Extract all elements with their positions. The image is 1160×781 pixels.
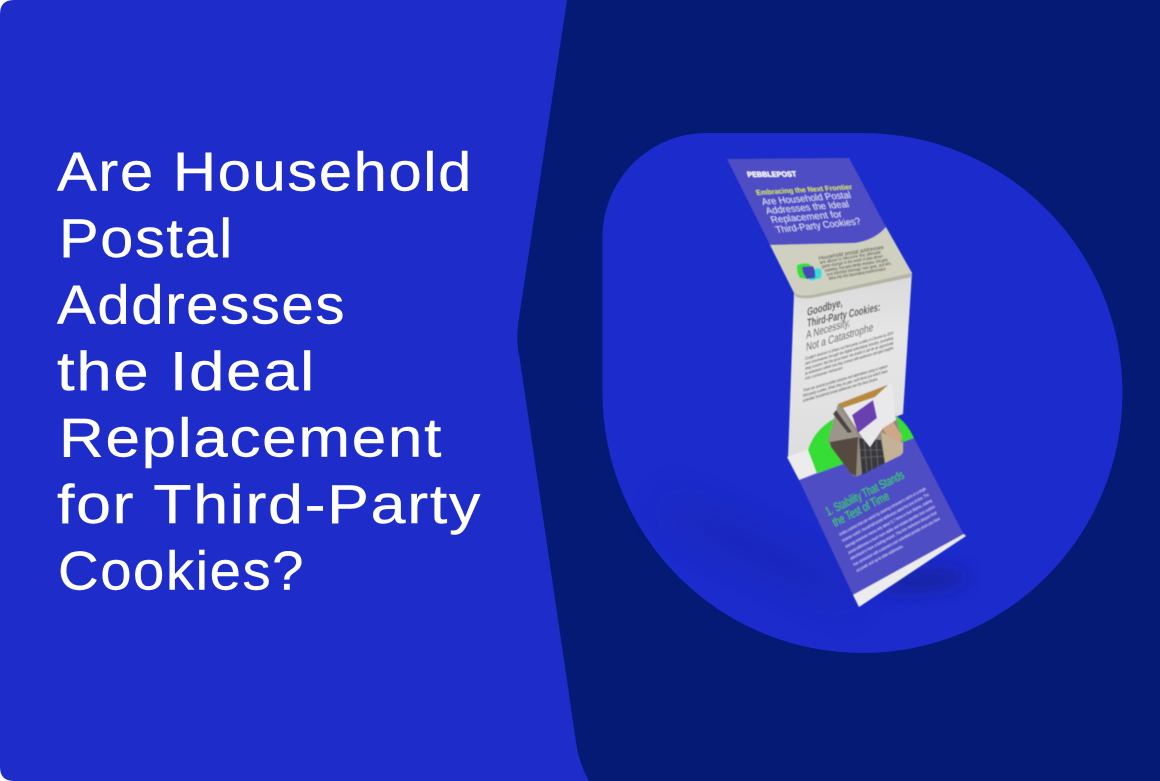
- body text: middle page: sent shockwaves through the digital advertising industry, prompting: [805, 335, 894, 366]
- envelope purple card: [852, 400, 877, 433]
- envelope paper: [843, 384, 896, 447]
- panel: fold flap: [787, 449, 817, 480]
- lower body text: [838, 486, 941, 573]
- brochure mockup: [727, 158, 966, 607]
- brochure title: [760, 190, 863, 236]
- body text: middle page: third-party cookies. When they do gain, we'll show you which have: [803, 368, 888, 398]
- title: for Third-Party: [57, 473, 482, 535]
- beige band text: your franchise leverage: here goes, and let's: [826, 261, 892, 277]
- panel: beige band: [770, 227, 912, 296]
- brochure shadow: faint left: [654, 489, 866, 615]
- icon: green and cyan badge: [797, 263, 822, 281]
- panel: dark right background: [400, 0, 1160, 781]
- heading: goodbye: Goodbye,: [807, 297, 843, 319]
- lower body text: accurate and up-to-date addresses.: [855, 543, 904, 573]
- beige band text: are about to become the ultimate: [819, 249, 882, 265]
- title: the Ideal: [57, 340, 316, 402]
- beige band text: Household postal addresses: [818, 245, 885, 262]
- logo text: PEBBLEPOST: [746, 170, 798, 179]
- photo wall stripe: [833, 410, 852, 433]
- title: Addresses: [57, 274, 346, 336]
- beige band text: marketing. First-party identity resolution, first-party: [824, 257, 889, 273]
- panel: beige band lip: [794, 272, 912, 298]
- heading: necessity: Not a Catastrophe: [806, 322, 873, 354]
- title: [57, 140, 482, 602]
- photo: hand holding mail over laptop: [828, 384, 903, 476]
- photo hand: [882, 420, 902, 442]
- heading: goodbye: Third-Party Cookies:: [807, 302, 881, 330]
- brochure title: Replacement for: [769, 209, 844, 226]
- body text: middle page: potential: household postal addresses are the best choice.: [803, 376, 878, 403]
- title: Are Household: [57, 140, 473, 202]
- lower body text: Unlike cookies that can vanish by clearing a browser's cache or a single: [838, 486, 927, 537]
- panel: blue left background: [0, 0, 589, 781]
- beige band text: game-changer in the world of data-driven: [821, 253, 884, 269]
- title: Postal: [59, 207, 234, 269]
- panel: middle white page: [788, 272, 912, 458]
- lower body text: advertised to have a lasting impact. This lets marketers deepen their: [849, 510, 938, 561]
- kicker: Embracing the Next Frontier: [755, 183, 854, 197]
- panel: white bottom strip: [853, 534, 966, 607]
- beige band text: delve into this fascinating transformation: [828, 266, 887, 281]
- photo wall with stripes: [829, 404, 858, 442]
- panel: purple top cover: [727, 158, 886, 245]
- body text: middle page: into consumer behavior.: [805, 365, 844, 381]
- brochure title: Third-Party Cookies?: [774, 217, 863, 236]
- photo laptop keyboard: [859, 438, 885, 475]
- shape: green half circle: [808, 414, 914, 474]
- body text: middle page: There are several possible solutions and alternatives vying to replace: [803, 363, 888, 393]
- body text: middle page: as advertisers rethink how they connect with audiences and gain insights: [805, 345, 893, 376]
- panel: purple lower page: [799, 438, 966, 607]
- title: Replacement: [59, 406, 443, 468]
- body text: middle page: deep concern. But the good news: we predict it can be an opportunity: [805, 340, 894, 371]
- lower body text: true connection with customers over extended periods when you have: [852, 516, 941, 567]
- panel: rounded blob behind brochure: [602, 133, 1123, 653]
- photo lower left dark: [830, 437, 858, 476]
- lower heading: 1. Stability That Stands: [823, 468, 906, 519]
- photo desk: [881, 432, 903, 463]
- envelope interior: [838, 385, 887, 408]
- title: Cookies?: [58, 540, 305, 602]
- lower body text: average American moves only about 11.7 times in their lifetime, making: [844, 498, 933, 549]
- body text: middle page: [803, 330, 894, 403]
- beige band text: [818, 245, 892, 281]
- body text: middle page: Google's decision to phase out third-party cookies in Chrome by 2024: [805, 330, 894, 361]
- brochure shadow: lower right: [877, 567, 967, 595]
- brochure title: Are Household Postal: [760, 190, 853, 208]
- brochure title: Addresses the Ideal: [764, 199, 851, 217]
- lower body text: browser switch, household postal addresses stand the test of time. The: [841, 492, 930, 543]
- heading: goodbye: [807, 297, 881, 330]
- lower body text: postal addresses a much more stable and reliable identifier than cookies: [847, 504, 936, 555]
- lower heading: the Test of Time: [830, 489, 892, 530]
- heading: necessity: A Necessity,: [806, 317, 850, 342]
